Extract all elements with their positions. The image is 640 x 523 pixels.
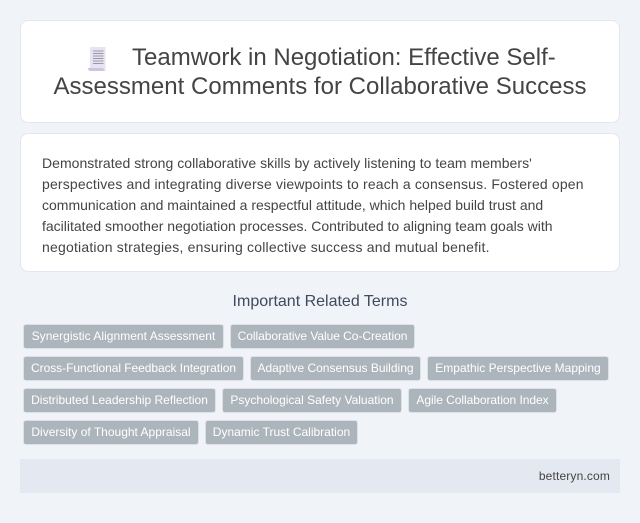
summary text: perspectives and integrating diverse viewpoints to reach a consensus. Fostered open <box>42 176 584 192</box>
summary text: Demonstrated strong collaborative skills by actively listening to team members' <box>42 155 532 171</box>
tag: Psychological Safety Valuation <box>230 393 394 407</box>
tag: Agile Collaboration Index <box>416 393 549 407</box>
tag <box>23 356 244 381</box>
tag <box>23 420 199 445</box>
summary text: communication and maintained a respectful attitude, which helped build trust and <box>42 197 543 213</box>
tag <box>230 324 415 349</box>
tag: Empathic Perspective Mapping <box>435 361 601 375</box>
footer site name: betteryn.com <box>539 469 610 483</box>
icon: document scroll <box>88 47 106 71</box>
tag <box>408 388 557 413</box>
title: Teamwork in Negotiation: Effective Self- <box>132 44 556 71</box>
footer bar <box>20 459 620 493</box>
section heading: Important Related Terms <box>233 293 407 310</box>
tag <box>222 388 402 413</box>
tag <box>427 356 609 381</box>
tag <box>250 356 421 381</box>
tag: Synergistic Alignment Assessment <box>32 329 215 343</box>
tag: Distributed Leadership Reflection <box>31 393 208 407</box>
tag <box>205 420 358 445</box>
title: Assessment Comments for Collaborative Success <box>53 73 587 100</box>
tag <box>23 388 216 413</box>
related term tags <box>23 324 609 445</box>
tag: Collaborative Value Co-Creation <box>238 329 407 343</box>
summary text: negotiation strategies, ensuring collective success and mutual benefit. <box>42 239 490 255</box>
summary text <box>42 155 584 255</box>
title <box>53 44 587 100</box>
tag: Diversity of Thought Appraisal <box>31 425 191 439</box>
tag <box>23 324 224 349</box>
tag: Adaptive Consensus Building <box>257 361 414 375</box>
tag: Dynamic Trust Calibration <box>213 425 350 439</box>
tag: Cross-Functional Feedback Integration <box>31 361 236 375</box>
summary text: facilitated smoother negotiation processes. Contributed to aligning team goals with <box>42 218 553 234</box>
header card <box>20 20 620 123</box>
summary card <box>20 133 620 272</box>
